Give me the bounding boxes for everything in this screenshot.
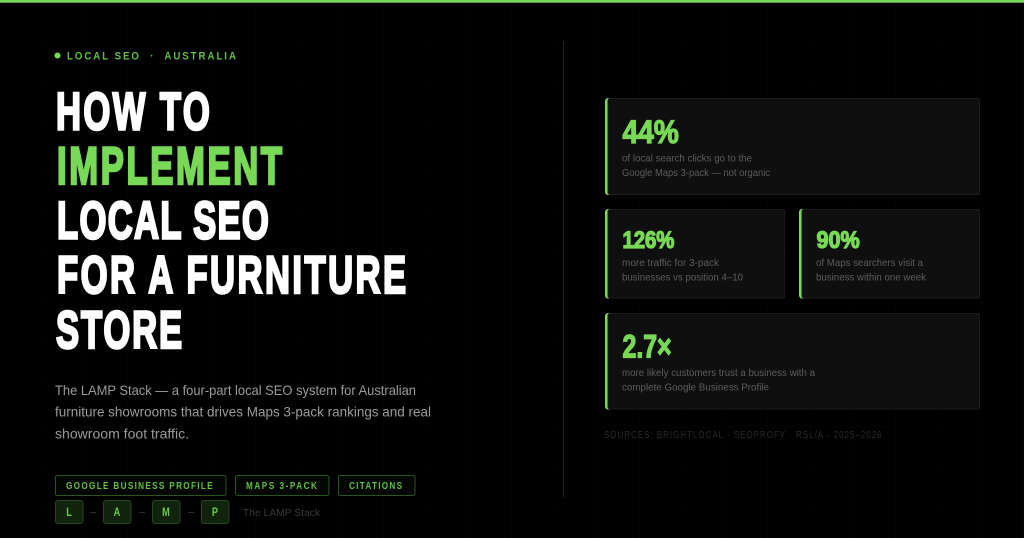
LAMP stack row bbox=[56, 500, 321, 524]
stat card: 2.7x: complete Google Business Profile bbox=[622, 382, 769, 394]
LAMP stack caption: The LAMP Stack bbox=[243, 508, 321, 519]
title bbox=[56, 83, 406, 360]
letter M bbox=[152, 500, 180, 524]
title: IMPLEMENT bbox=[57, 138, 282, 196]
stat card: 44%: 44% bbox=[622, 115, 679, 150]
stat card: 44%: Google Maps 3-pack — not organic bbox=[622, 167, 770, 179]
stat card: 90%: of Maps searchers visit a bbox=[816, 257, 923, 269]
title: FOR A FURNITURE bbox=[57, 247, 406, 305]
intro paragraph bbox=[55, 382, 431, 442]
letter A bbox=[104, 500, 131, 524]
tag: Google Business Profile bbox=[56, 476, 226, 496]
stat card: 44%: of local search clicks go to the bbox=[622, 152, 752, 164]
intro paragraph: The LAMP Stack — a four-part local SEO system for Australian bbox=[55, 382, 416, 398]
letter A: A bbox=[114, 507, 121, 519]
stat card: 44% bbox=[605, 98, 980, 195]
intro paragraph: furniture showrooms that drives Maps 3-pack rankings and real bbox=[55, 404, 431, 420]
title: LOCAL SEO bbox=[57, 192, 269, 250]
eyebrow: local SEO Australia: LOCAL SEO · AUSTRALIA bbox=[67, 51, 236, 63]
stat card: 2.7x: more likely customers trust a business with a bbox=[622, 367, 815, 379]
stat card: 126%: 126% bbox=[622, 226, 675, 253]
vertical divider bbox=[563, 41, 564, 497]
letter P: P bbox=[212, 507, 218, 519]
tag: Citations: CITATIONS bbox=[349, 479, 402, 491]
stat card: 90% bbox=[799, 209, 980, 298]
stat card: 126%: businesses vs position 4–10 bbox=[622, 272, 743, 284]
stat card: 90%: 90% bbox=[816, 226, 860, 253]
sources note: SOURCES: BRIGHTLOCAL · SEOPROFY · RSL/A · 2025–2026 bbox=[604, 429, 882, 440]
top accent bar bbox=[0, 0, 1024, 3]
stat card: 126%: more traffic for 3-pack bbox=[622, 257, 720, 269]
tags bbox=[56, 476, 415, 496]
title: STORE bbox=[56, 302, 182, 360]
stat card: 90%: business within one week bbox=[816, 272, 927, 284]
stat card: 2.7x: 2.7× bbox=[622, 330, 672, 365]
letter L: L bbox=[66, 507, 72, 519]
intro paragraph: showroom foot traffic. bbox=[55, 426, 189, 442]
tag: Citations bbox=[338, 476, 415, 496]
tag: Google Business Profile: GOOGLE BUSINESS PROFILE bbox=[66, 479, 213, 491]
letter M: M bbox=[162, 507, 170, 519]
tag: Maps 3-Pack: MAPS 3-PACK bbox=[246, 479, 317, 491]
letter P bbox=[202, 500, 229, 524]
tag: Maps 3-Pack bbox=[236, 476, 329, 496]
stat card: 126% bbox=[605, 209, 785, 298]
title: HOW TO bbox=[56, 83, 210, 141]
letter L bbox=[56, 500, 83, 524]
stat card: 2.7x bbox=[605, 313, 980, 410]
